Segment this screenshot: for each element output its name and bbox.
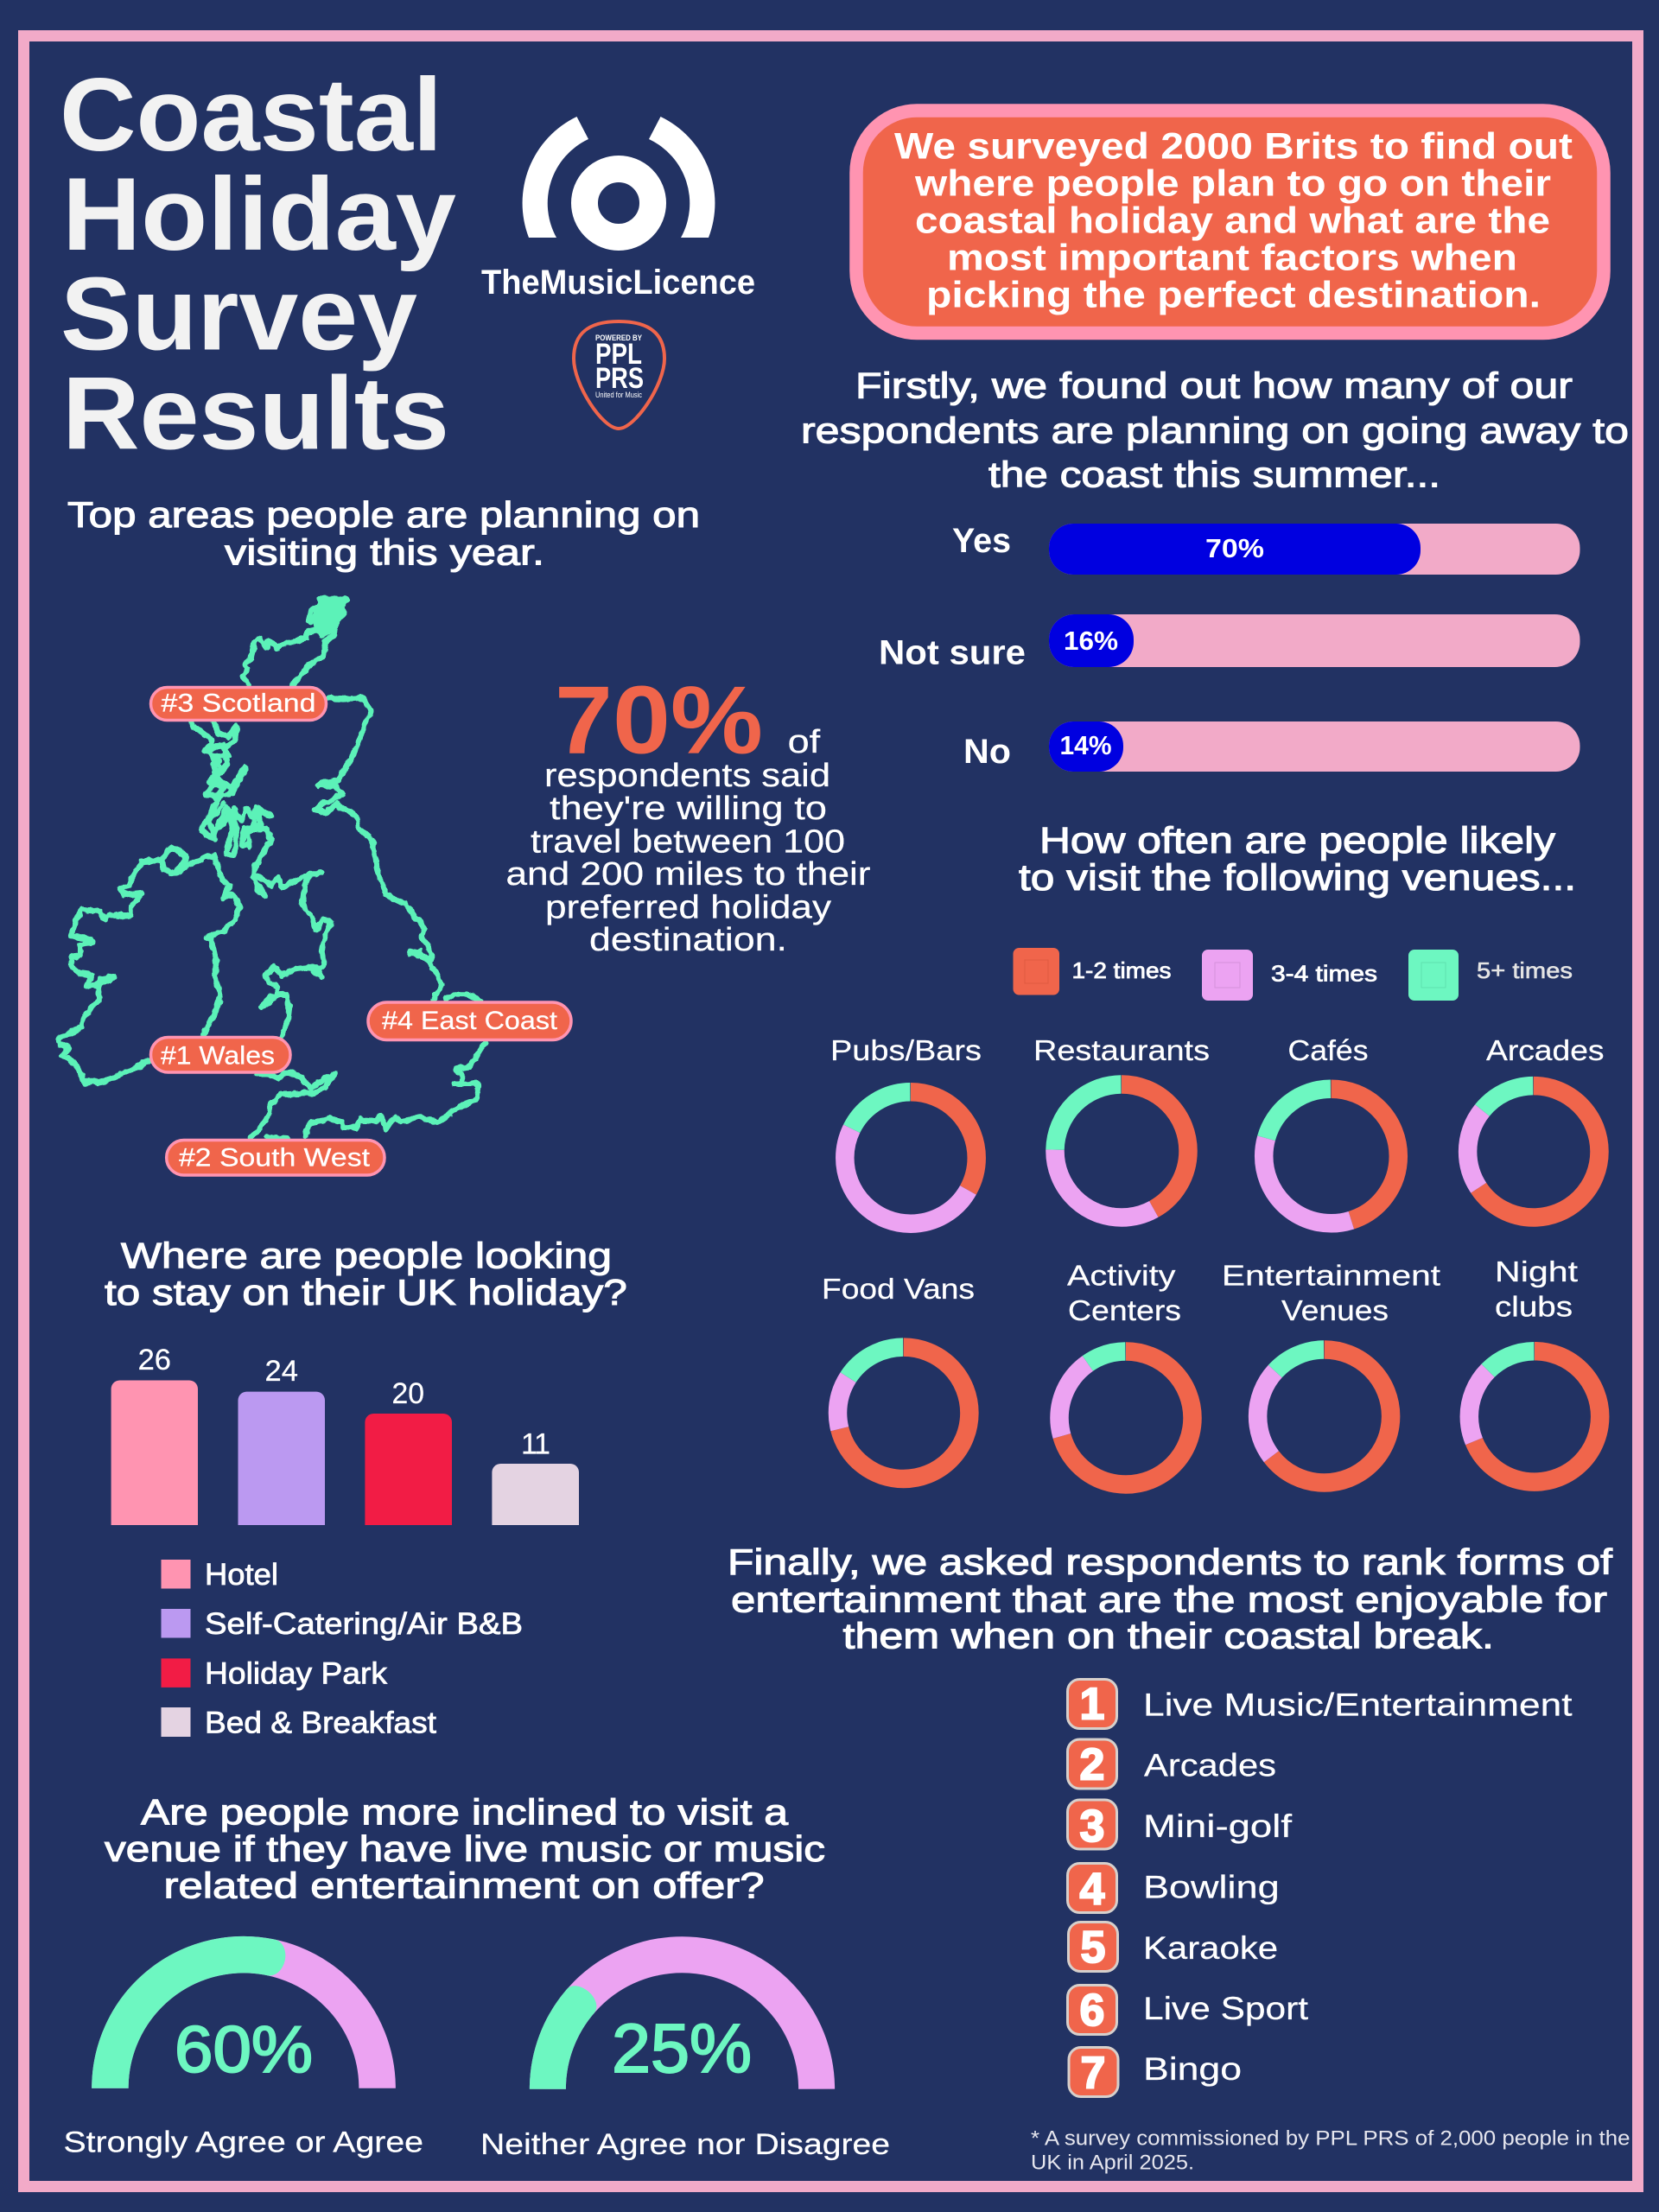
label: #3 Scotland: #3 Scotland (161, 690, 316, 717)
rank 3 (1068, 1800, 1293, 1852)
label: #2 South West: #2 South West (179, 1144, 371, 1172)
legend: accommodation (161, 1558, 523, 1740)
label: #4 East Coast: #4 East Coast (382, 1007, 558, 1035)
logo: PPL PRS guitar pick: PRS (595, 362, 644, 395)
bar: yes 70% (952, 522, 1580, 575)
heading: entertainment ranking: Finally, we asked respondents to rank forms of (728, 1541, 1612, 1582)
stat: 70% willing to travel: preferred holiday (545, 890, 831, 926)
stat: 70% willing to travel: of (788, 724, 821, 760)
callout: survey introduction (856, 111, 1604, 334)
rank 7 (1069, 2048, 1242, 2098)
title: Results (62, 356, 449, 472)
donut: Entertainment Venues (1222, 1260, 1440, 1483)
stat: 70% willing to travel: respondents said (544, 758, 830, 794)
heading: live music inclination: venue if they have live music or music (105, 1828, 825, 1869)
map outline (58, 598, 486, 1138)
bar chart: coastal plans (879, 522, 1580, 772)
bar: Holiday Park 20 (365, 1377, 452, 1525)
rank 2: Arcades (1144, 1748, 1276, 1783)
donut: Pubs/Bars: Pubs/Bars (830, 1034, 982, 1066)
legend: visit frequency (1013, 948, 1573, 1001)
gauge: neither agree nor disagree 25%: Neither Agree nor Disagree (480, 2128, 890, 2161)
donut: Activity Centers: Centers (1068, 1294, 1181, 1326)
bar: Holiday Park 20: 20 (392, 1377, 424, 1410)
heading: entertainment ranking: them when on their coastal break. (843, 1616, 1494, 1656)
footnote (1031, 2127, 1630, 2175)
legend item: Holiday Park: Holiday Park (205, 1657, 388, 1690)
rank 6 (1068, 1986, 1309, 2036)
heading: top areas: Top areas people are planning on (67, 494, 700, 535)
bar: Bed and Breakfast 11 (492, 1427, 579, 1525)
heading: top areas (67, 494, 700, 572)
rank 5 (1068, 1922, 1278, 1973)
donut: Night clubs: clubs (1495, 1291, 1573, 1323)
legend item: Self-Catering/Air B&B: Self-Catering/Air B&B (205, 1607, 523, 1641)
legend item: Hotel: Hotel (205, 1558, 278, 1592)
label: #2 South West (167, 1141, 385, 1175)
bar: no 14%: 14% (1059, 730, 1111, 760)
donut: Arcades (1468, 1034, 1604, 1217)
rank 1: Live Music/Entertainment (1143, 1687, 1573, 1723)
rank 6: Live Sport (1143, 1991, 1309, 2026)
footnote: UK in April 2025. (1031, 2152, 1194, 2175)
heading: live music inclination: Are people more inclined to visit a (141, 1792, 789, 1833)
bar chart: accommodation (111, 1344, 579, 1525)
logo: PPL PRS guitar pick: PPL (595, 338, 642, 371)
heading: entertainment ranking: entertainment that are the most enjoyable for (731, 1580, 1607, 1619)
heading: going away this summer: Firstly, we found out how many of our (855, 365, 1573, 406)
bar: Self-Catering 24: 24 (264, 1355, 298, 1388)
heading: venue frequency (1019, 820, 1576, 899)
legend item: 3-4 times: 3-4 times (1271, 961, 1377, 987)
heading: where to stay: to stay on their UK holiday? (105, 1272, 627, 1313)
stat: 70% willing to travel: and 200 miles to their (506, 856, 871, 893)
donut: Activity Centers (1059, 1260, 1192, 1484)
callout: survey introduction: We surveyed 2000 Brits to find out (894, 126, 1573, 168)
donut: Cafés (1264, 1034, 1398, 1224)
rank 2 (1068, 1739, 1276, 1790)
donut: Night clubs (1469, 1255, 1600, 1482)
label: #1 Wales: #1 Wales (161, 1042, 275, 1070)
rank 5: 5 (1081, 1923, 1105, 1973)
donut: Pubs/Bars (830, 1034, 982, 1224)
stat: 70% willing to travel: travel between 100 (531, 824, 845, 861)
rank 7: 7 (1081, 2048, 1105, 2098)
rank 4: Bowling (1143, 1870, 1280, 1904)
donut: Restaurants: Restaurants (1033, 1034, 1210, 1066)
rank 3: 3 (1080, 1802, 1104, 1852)
heading: live music inclination (105, 1792, 825, 1906)
bar: not sure 16%: Not sure (879, 634, 1026, 672)
donut: Entertainment Venues: Venues (1281, 1294, 1389, 1326)
heading: live music inclination: related entertainment on offer? (164, 1866, 764, 1906)
label: #4 East Coast (368, 1002, 571, 1040)
gauge: neither agree nor disagree 25% (480, 1955, 890, 2161)
legend item: 3-4 times (1202, 950, 1377, 1001)
legend item: Hotel (161, 1558, 278, 1592)
legend item: 5+ times (1408, 950, 1573, 1001)
stat: 70% willing to travel (506, 667, 871, 958)
donut: Restaurants (1033, 1034, 1210, 1217)
rank 1 (1068, 1680, 1573, 1730)
stat: 70% willing to travel: destination. (589, 922, 787, 958)
stat: 70% willing to travel: they're willing to (550, 791, 827, 827)
rank 4 (1068, 1863, 1280, 1915)
bar: not sure 16% (879, 614, 1580, 672)
donut: Food Vans (822, 1273, 975, 1479)
donut: Activity Centers: Activity (1067, 1260, 1176, 1292)
donut: Entertainment Venues: Entertainment (1222, 1260, 1440, 1292)
stat: 70% willing to travel: 70% (555, 667, 763, 774)
bar: no 14% (963, 721, 1580, 772)
gauge: strongly agree or agree 60% (64, 1936, 423, 2158)
rank 4: 4 (1080, 1865, 1105, 1915)
callout: survey introduction: most important factors when (947, 237, 1517, 278)
title: Survey (60, 256, 417, 372)
donut: Night clubs: Night (1495, 1255, 1578, 1287)
rank 3: Mini-golf (1143, 1808, 1293, 1844)
title (60, 57, 456, 472)
gauge: strongly agree or agree 60%: 60% (175, 2013, 313, 2087)
logo: The Music Licence (481, 117, 755, 302)
legend item: Bed & Breakfast: Bed & Breakfast (205, 1706, 436, 1740)
logo: PPL PRS guitar pick (574, 321, 664, 429)
bar: Self-Catering 24 (238, 1355, 325, 1525)
heading: entertainment ranking (728, 1541, 1612, 1656)
rank 2: 2 (1080, 1740, 1104, 1790)
gauge: strongly agree or agree 60%: Strongly Agree or Agree (64, 2126, 423, 2158)
heading: going away this summer: respondents are planning on going away to (801, 410, 1629, 451)
legend item: 1-2 times: 1-2 times (1071, 957, 1172, 983)
legend item: 5+ times: 5+ times (1477, 957, 1573, 983)
donut: Cafés: Cafés (1287, 1034, 1369, 1066)
heading: venue frequency: How often are people likely (1039, 820, 1556, 861)
donut charts: venues (822, 1034, 1604, 1484)
donut: Arcades: Arcades (1486, 1034, 1604, 1066)
logo: The Music Licence: TheMusicLicence (481, 264, 755, 302)
title: Holiday (62, 156, 456, 272)
heading: venue frequency: to visit the following venues... (1019, 857, 1576, 899)
heading: going away this summer: the coast this summer... (988, 454, 1440, 494)
gauge: neither agree nor disagree 25%: 25% (612, 2010, 752, 2087)
rank 7: Bingo (1143, 2051, 1242, 2087)
map: UK and Ireland coastline with labels (58, 598, 571, 1175)
bar: Bed and Breakfast 11: 11 (521, 1427, 550, 1460)
bar: yes 70%: 70% (1205, 533, 1264, 563)
legend item: 1-2 times (1013, 948, 1172, 995)
donut: Food Vans: Food Vans (822, 1273, 975, 1305)
callout: survey introduction: picking the perfect destination. (926, 275, 1541, 316)
label: #1 Wales (150, 1037, 290, 1072)
heading: where to stay: Where are people looking (121, 1235, 612, 1275)
rank 6: 6 (1080, 1986, 1104, 2036)
logo: PPL PRS guitar pick: POWERED BY (595, 334, 643, 343)
heading: top areas: visiting this year. (225, 532, 544, 572)
rank 1: 1 (1080, 1680, 1104, 1730)
rank 5: Karaoke (1143, 1930, 1278, 1966)
bar: Hotel 26 (111, 1344, 198, 1525)
bar: not sure 16%: 16% (1064, 626, 1118, 656)
heading: where to stay (105, 1235, 627, 1313)
callout: survey introduction: coastal holiday and what are the (915, 200, 1550, 242)
bar: no 14%: No (963, 733, 1011, 771)
bar: Hotel 26: 26 (138, 1344, 171, 1376)
bar: yes 70%: Yes (952, 522, 1011, 560)
label: #3 Scotland (150, 688, 327, 721)
title: Coastal (60, 57, 442, 173)
heading: going away this summer (801, 365, 1629, 494)
logo: PPL PRS guitar pick: United for Music (595, 391, 642, 399)
footnote: * A survey commissioned by PPL PRS of 2,000 people in the (1031, 2127, 1630, 2150)
ranked list: entertainment (1068, 1680, 1573, 2098)
callout: survey introduction: where people plan to go on their (914, 162, 1551, 204)
